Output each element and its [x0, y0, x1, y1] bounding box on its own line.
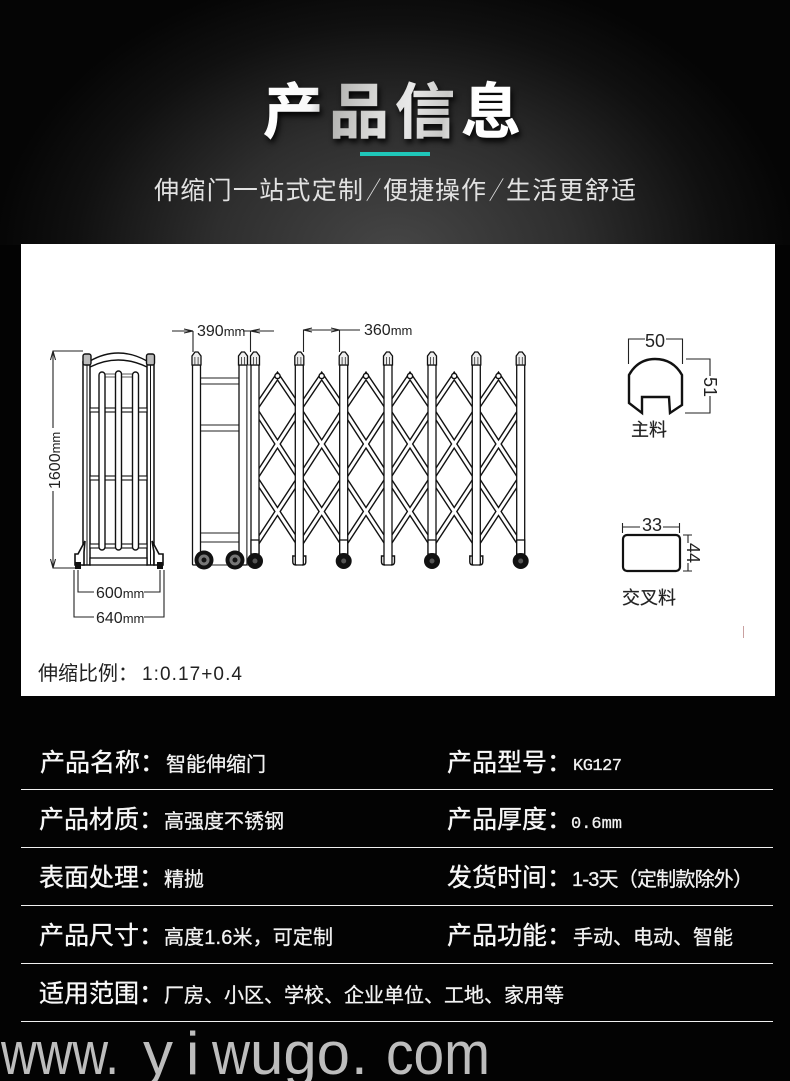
front view of gate — [75, 353, 163, 569]
cross member section — [622, 515, 703, 608]
title: 产品信息 — [263, 79, 521, 146]
main profile section — [628, 331, 720, 440]
subtitle — [154, 171, 636, 207]
telescopic ratio caption: 1:0.17+0.4 — [142, 664, 242, 685]
spec row 3: 表面处理： — [39, 864, 164, 892]
teal accent bar — [360, 152, 430, 156]
spec row 2: 产品厚度： — [447, 806, 572, 834]
spec row 4: 产品功能： — [447, 922, 572, 950]
dimension: 51: 51 — [700, 377, 720, 397]
dimension: 1600mm height: 1600mm — [47, 432, 64, 489]
spec row 1 — [21, 749, 773, 790]
dimension: 600mm width: 600mm — [96, 585, 144, 602]
panel: product dimension drawing — [21, 244, 775, 696]
spec row 2: 产品材质： — [39, 806, 164, 834]
subtitle: ／ — [489, 171, 504, 207]
spec row 4: 手动、电动、智能 — [573, 926, 733, 949]
spec row 5: 适用范围： — [39, 980, 164, 1008]
spec row 2 — [21, 806, 773, 848]
spec row 2: 高强度不锈钢 — [164, 810, 284, 833]
dimension: 44: 44 — [683, 543, 703, 563]
spec row 3 — [21, 864, 773, 906]
subtitle: ／ — [366, 171, 381, 207]
dimension: 360mm — [304, 322, 412, 352]
label: cross material: 交叉料 — [622, 588, 676, 608]
telescopic ratio caption: 伸缩比例： — [38, 662, 138, 685]
dimension: 50: 50 — [645, 331, 665, 351]
dimension: 360mm: 360mm — [364, 322, 412, 339]
spec row 2: 0.6mm — [571, 815, 622, 834]
spec row 1: 产品型号： — [447, 749, 572, 777]
spec row 1: 产品名称： — [40, 749, 165, 777]
subtitle: 伸缩门一站式定制 — [154, 171, 363, 207]
dimension: 33: 33 — [642, 515, 662, 535]
dimension: 640mm width — [74, 570, 164, 627]
spec row 1: KG127 — [573, 757, 622, 776]
subtitle: 便捷操作 — [383, 171, 486, 207]
dimension: 640mm width: 640mm — [96, 610, 144, 627]
scissor lattice gate — [247, 352, 529, 569]
spec row 5: 厂房、小区、学校、企业单位、工地、家用等 — [164, 984, 564, 1007]
subtitle: 生活更舒适 — [506, 171, 636, 207]
spec row 3: 1-3天（定制款除外） — [572, 868, 753, 891]
spec row 4 — [21, 922, 773, 964]
dimension: 390mm: 390mm — [197, 323, 245, 340]
telescopic ratio caption — [38, 662, 242, 685]
side view frame with wheels — [192, 352, 251, 570]
spec row 5 — [21, 980, 773, 1022]
dimension: 600mm width — [78, 570, 160, 602]
label: main material: 主料 — [631, 420, 667, 440]
spec row 4: 产品尺寸： — [39, 922, 164, 950]
small tick mark — [743, 626, 744, 638]
dimension: 390mm — [172, 323, 274, 352]
spec row 3: 精抛 — [164, 868, 204, 891]
header glow background — [0, 0, 790, 245]
dimension: 1600mm height — [45, 351, 83, 568]
spec row 1: 智能伸缩门 — [166, 753, 266, 776]
spec row 3: 发货时间： — [447, 864, 572, 892]
spec row 4: 高度1.6米，可定制 — [164, 926, 333, 949]
watermark — [0, 1020, 490, 1081]
